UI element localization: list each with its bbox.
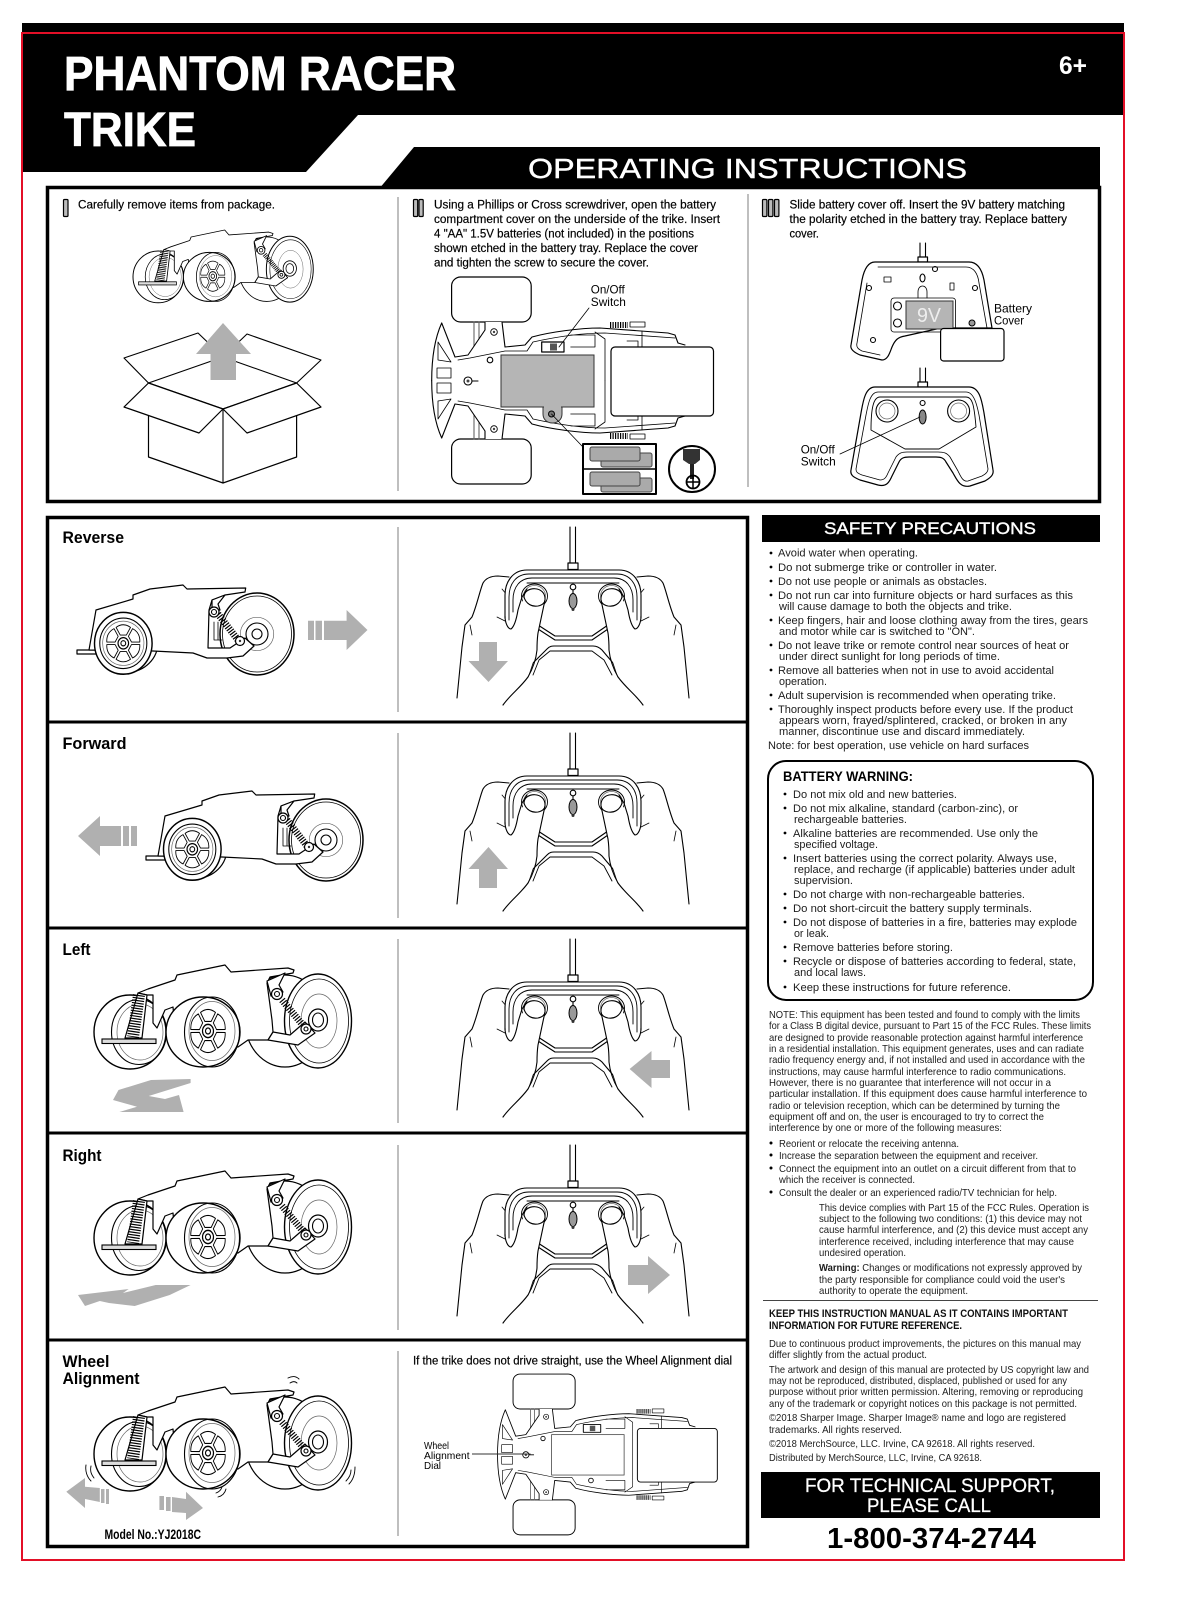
FCC notice	[769, 1010, 1091, 1297]
step 3 text: the polarity etched in the battery tray. Replace battery	[790, 212, 1068, 226]
icon: hands on controller	[457, 527, 689, 705]
step 2 text: compartment cover on the underside of the trike. Insert	[434, 212, 721, 226]
icon: controller back with 9V battery	[851, 243, 1004, 361]
arrow: turn dial left	[66, 1478, 109, 1508]
FCC notice: equipment off and on, the user is encouraged to try to correct the	[769, 1112, 1044, 1123]
panel: battery warning: Insert batteries using the correct polarity. Always use,	[793, 853, 1057, 865]
safety list: Adult supervision is recommended when operating trike.	[778, 690, 1056, 702]
arrow: stick left	[630, 1051, 670, 1088]
arrow: curved left	[113, 1079, 191, 1112]
FCC notice: instructions, may cause harmful interference to radio communications.	[769, 1067, 1066, 1078]
panel: battery warning: or leak.	[794, 928, 829, 940]
FCC notice: radio frequency energy and, if not installed and used in accordance with the	[769, 1055, 1085, 1066]
row: forward	[62, 733, 689, 911]
safety list: and motor while car is switched to "ON".	[779, 626, 975, 638]
step 2 text: and tighten the screw to secure the cover.	[434, 256, 649, 270]
safety list: Do not submerge trike or controller in water.	[778, 562, 997, 574]
FCC notice: particular installation. If this equipment does cause harmful interference to	[769, 1089, 1087, 1100]
safety precautions header: SAFETY PRECAUTIONS	[824, 519, 1036, 538]
FCC notice: This device complies with Part 15 of the FCC Rules. Operation is	[819, 1203, 1089, 1214]
panel: battery warning: Alkaline batteries are recommended. Use only the	[793, 828, 1038, 840]
safety list: Avoid water when operating.	[778, 548, 918, 560]
on/off switch label: On/Off	[591, 282, 625, 296]
heading: Alignment	[62, 1370, 140, 1388]
icon: trike three-quarter view	[94, 1387, 352, 1491]
step 2 text: Using a Phillips or Cross screwdriver, open the battery	[434, 198, 717, 212]
safety precautions header	[762, 515, 1100, 542]
icon: hands on controller	[457, 733, 689, 911]
icon: trike three-quarter view	[94, 1171, 352, 1275]
step 3 text: cover.	[790, 226, 819, 240]
heading: Left	[62, 941, 91, 959]
FCC notice: Warning: Changes or modifications not expressly approved by	[819, 1263, 1083, 1274]
technical support banner: FOR TECHNICAL SUPPORT,	[805, 1475, 1055, 1497]
FCC notice: NOTE: This equipment has been tested and found to comply with the limits	[769, 1010, 1080, 1021]
technical support banner	[761, 1472, 1100, 1518]
step 1 text	[64, 198, 275, 216]
safety list: Do not leave trike or remote control near sources of heat or	[778, 640, 1069, 652]
on/off switch label: On/Off	[801, 442, 835, 456]
safety list: operation.	[779, 676, 827, 688]
age rating: 6+	[1059, 52, 1087, 80]
FCC notice: interference by one or more of the following measures:	[769, 1123, 1002, 1134]
panel: battery warning: Do not dispose of batteries in a fire, batteries may explode	[793, 917, 1077, 929]
panel: battery warning: replace, and recharge (if applicable) batteries under adult	[794, 864, 1076, 876]
battery cover label: Cover	[994, 314, 1024, 328]
safety list: appears worn, frayed/splintered, cracked, or broken in any	[779, 715, 1067, 727]
panel: battery warning: supervision.	[794, 875, 853, 887]
vibration marks	[86, 1377, 355, 1497]
icon: trike underside	[432, 277, 714, 484]
safety list: Note: for best operation, use vehicle on hard surfaces	[768, 740, 1029, 752]
icon: trike side view	[146, 791, 363, 881]
arrow: curved right	[78, 1285, 191, 1306]
panel: battery warning: Do not mix alkaline, standard (carbon-zinc), or	[793, 803, 1018, 815]
safety list: Remove all batteries when not in use to avoid accidental	[778, 665, 1054, 677]
panel: battery warning: rechargeable batteries.	[794, 814, 907, 826]
safety list: will cause damage to both the objects and trike.	[778, 601, 1012, 613]
step 3 text: Slide battery cover off. Insert the 9V battery matching	[790, 198, 1065, 212]
icon: trike from package	[133, 230, 313, 303]
panel: battery warning: Do not short-circuit the battery supply terminals.	[793, 903, 1032, 915]
safety list	[768, 548, 1088, 752]
operating instructions heading band	[379, 147, 1100, 189]
panel: battery warning: Recycle or dispose of batteries according to federal, state,	[793, 956, 1076, 968]
row: left	[62, 939, 689, 1117]
legal text: INFORMATION FOR FUTURE REFERENCE.	[769, 1320, 962, 1332]
FCC notice: are designed to provide reasonable protection against harmful interference	[769, 1033, 1083, 1044]
row: right	[62, 1145, 689, 1323]
legal text: ©2018 MerchSource, LLC. Irvine, CA 92618. All rights reserved.	[769, 1439, 1035, 1450]
row: reverse	[62, 527, 689, 705]
panel: battery warning: Remove batteries before storing.	[793, 942, 953, 954]
title: TRIKE	[64, 104, 196, 157]
on/off switch label: Switch	[591, 295, 626, 309]
FCC notice: radio or television reception, which can be determined by turning the	[769, 1101, 1060, 1112]
on/off switch label	[591, 282, 626, 309]
step 3 text	[762, 198, 1068, 240]
wheel alignment dial label: Wheel	[424, 1440, 449, 1452]
legal text	[769, 1308, 1089, 1464]
wheel alignment dial label: Alignment	[424, 1450, 470, 1462]
safety list: Keep fingers, hair and loose clothing away from the tires, gears	[778, 615, 1088, 627]
on/off switch label: Switch	[801, 454, 836, 468]
panel: battery warning	[768, 761, 1093, 1000]
FCC notice: Increase the separation between the equipment and receiver.	[779, 1151, 1038, 1162]
icon: trike side view	[77, 585, 294, 675]
step 2 text: shown etched in the battery tray. Replace the cover	[434, 241, 698, 255]
legal text: differ slightly from the actual product.	[769, 1350, 927, 1361]
arrow: right	[308, 610, 368, 650]
FCC notice: Reorient or relocate the receiving antenna.	[779, 1139, 959, 1150]
FCC notice: interference received, including interference that may cause	[819, 1237, 1074, 1248]
wheel alignment dial label	[424, 1440, 530, 1472]
legal text: ©2018 Sharper Image. Sharper Image® name and logo are registered	[769, 1413, 1066, 1424]
FCC notice: in a residential installation. This equipment generates, uses and can radiate	[769, 1044, 1084, 1055]
safety list: Do not run car into furniture objects or hard surfaces as this	[778, 590, 1073, 602]
legal text: trademarks. All rights reserved.	[769, 1425, 902, 1436]
battery cover label	[994, 302, 1032, 328]
legal text: may not be reproduced, distributed, displaced, published or used for any	[769, 1376, 1068, 1387]
icon: AA batteries inset	[583, 444, 656, 494]
heading: Right	[62, 1147, 102, 1165]
arrow: stick down	[468, 642, 508, 682]
heading: Forward	[62, 735, 126, 753]
legal text: KEEP THIS INSTRUCTION MANUAL AS IT CONTAINS IMPORTANT	[769, 1308, 1068, 1320]
panel: battery warning: Do not mix old and new batteries.	[793, 789, 957, 801]
on/off switch label	[801, 442, 836, 468]
phone number: 1-800-374-2744	[827, 1523, 1036, 1555]
panel: battery warning: Do not charge with non-rechargeable batteries.	[793, 889, 1025, 901]
icon: trike underside	[498, 1374, 717, 1535]
FCC notice: for a Class B digital device, pursuant to Part 15 of the FCC Rules. These limits	[769, 1021, 1091, 1032]
top black strip	[22, 23, 1124, 34]
legal text: any of the trademark or copyright notices on this package is not permitted.	[769, 1399, 1077, 1410]
step 2 text	[414, 198, 721, 270]
FCC notice: However, there is no guarantee that interference will not occur in a	[769, 1078, 1051, 1089]
heading: Wheel	[62, 1353, 110, 1371]
title: PHANTOM RACER	[64, 48, 456, 101]
model number: Model No.:YJ2018C	[104, 1526, 201, 1542]
icon: hands on controller	[457, 1145, 689, 1323]
panel: driving controls	[47, 518, 748, 1546]
battery cover	[941, 320, 1004, 361]
FCC notice: the party responsible for compliance could void the user's	[819, 1275, 1065, 1286]
title	[64, 48, 456, 157]
panel: battery warning: and local laws.	[794, 967, 866, 979]
FCC notice: cause harmful interference, and (2) this device must accept any	[819, 1225, 1089, 1236]
panel: battery warning: Keep these instructions for future reference.	[793, 982, 1011, 994]
FCC notice: which the receiver is connected.	[778, 1175, 915, 1186]
step 1 text: Carefully remove items from package.	[78, 198, 275, 212]
heading: BATTERY WARNING:	[783, 768, 913, 784]
instruction text: If the trike does not drive straight, use the Wheel Alignment dial	[413, 1354, 732, 1368]
panel: battery warning: specified voltage.	[794, 839, 878, 851]
legal text: Due to continuous product improvements, the pictures on this manual may	[769, 1339, 1082, 1350]
arrow: lift out	[196, 323, 251, 380]
FCC notice: Connect the equipment into an outlet on a circuit different from that to	[779, 1164, 1076, 1175]
legal text: The artwork and design of this manual are protected by US copyright law and	[769, 1365, 1089, 1376]
arrow: left	[78, 816, 137, 856]
FCC notice: subject to the following two conditions: (1) this device may not	[819, 1214, 1082, 1225]
panel: setup steps	[48, 188, 1100, 502]
icon: screwdriver	[669, 446, 715, 492]
icon: trike three-quarter view	[94, 965, 352, 1069]
FCC notice: authority to operate the equipment.	[819, 1286, 968, 1297]
icon: controller front	[840, 368, 993, 486]
legal text: Distributed by MerchSource, LLC, Irvine, CA 92618.	[769, 1453, 982, 1464]
legal text: purpose without prior written permission. Altering, removing or reproducing	[769, 1387, 1083, 1398]
arrow: stick up	[468, 847, 508, 888]
arrow: stick right	[628, 1256, 670, 1294]
heading	[62, 1353, 140, 1388]
safety list: manner, discontinue use and discard immediately.	[779, 726, 1025, 738]
page header banner	[22, 33, 1124, 172]
technical support banner: PLEASE CALL	[867, 1495, 991, 1517]
step 2 text: 4 "AA" 1.5V batteries (not included) in the positions	[434, 226, 694, 240]
icon: open cardboard box	[124, 323, 321, 483]
row: wheel alignment	[62, 1353, 732, 1542]
safety list: Do not use people or animals as obstacles.	[778, 576, 987, 588]
icon: hands on controller	[457, 939, 689, 1117]
safety list: under direct sunlight for long periods of time.	[779, 651, 1000, 663]
FCC notice: Consult the dealer or an experienced radio/TV technician for help.	[779, 1188, 1057, 1199]
wheel alignment dial label: Dial	[424, 1460, 441, 1472]
battery cover label: Battery	[994, 302, 1032, 316]
icon: controller back with 9V battery: 9V	[917, 305, 942, 327]
operating instructions heading band: OPERATING INSTRUCTIONS	[528, 153, 967, 184]
safety list: Thoroughly inspect products before every use. If the product	[778, 704, 1074, 716]
FCC notice: undesired operation.	[819, 1248, 906, 1259]
heading: Reverse	[62, 529, 124, 547]
arrow: turn dial right	[159, 1492, 203, 1520]
